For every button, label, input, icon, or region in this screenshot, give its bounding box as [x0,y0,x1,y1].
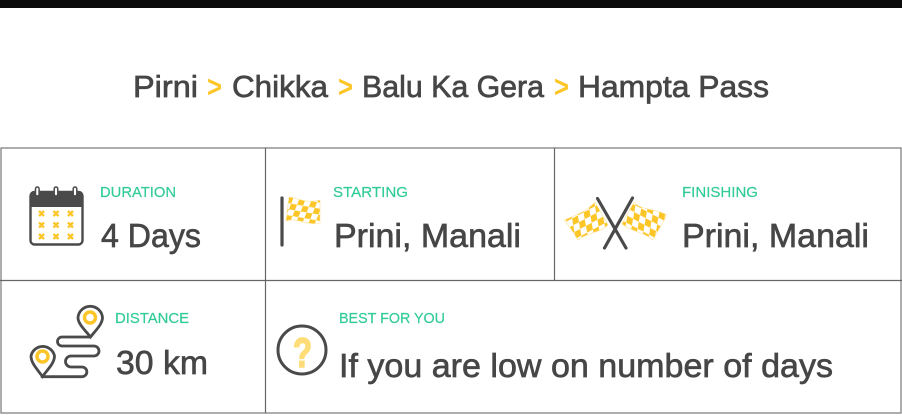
label: duration: DURATION [100,184,176,201]
value: 30 km: 30 km [116,344,208,381]
icon: question mark: ? [293,329,312,376]
panel: distance [31,306,208,381]
icon: crossed flags [564,198,667,248]
title: route: Chikka [232,69,329,104]
panel: starting [282,184,521,254]
title: route: Pirni [133,69,198,104]
value: finishing place: Prini, Manali [682,217,869,254]
panel: finishing [564,184,869,254]
title: route: > [554,69,569,104]
value: 4 days: 4 Days [101,217,201,254]
label: best for you: BEST FOR YOU [339,310,445,327]
label: starting: STARTING [333,184,408,201]
icon: question mark [278,326,326,376]
label: distance: DISTANCE [115,310,189,327]
title: route: > [207,69,222,104]
panel: best for you [278,310,833,384]
icon: starting flag [282,197,320,245]
top bar [0,0,902,8]
title: route [133,69,769,104]
title: route: Hampta Pass [578,69,769,104]
icon: calendar [30,187,83,244]
panel: duration [30,184,201,254]
table grid [0,148,902,413]
value: best for you: If you are low on number of days [339,347,833,384]
label: finishing: FINISHING [682,184,758,201]
title: route: > [338,69,353,104]
value: starting place: Prini, Manali [334,217,521,254]
icon: route with pins [31,306,102,377]
title: route: Balu Ka Gera [362,69,545,104]
